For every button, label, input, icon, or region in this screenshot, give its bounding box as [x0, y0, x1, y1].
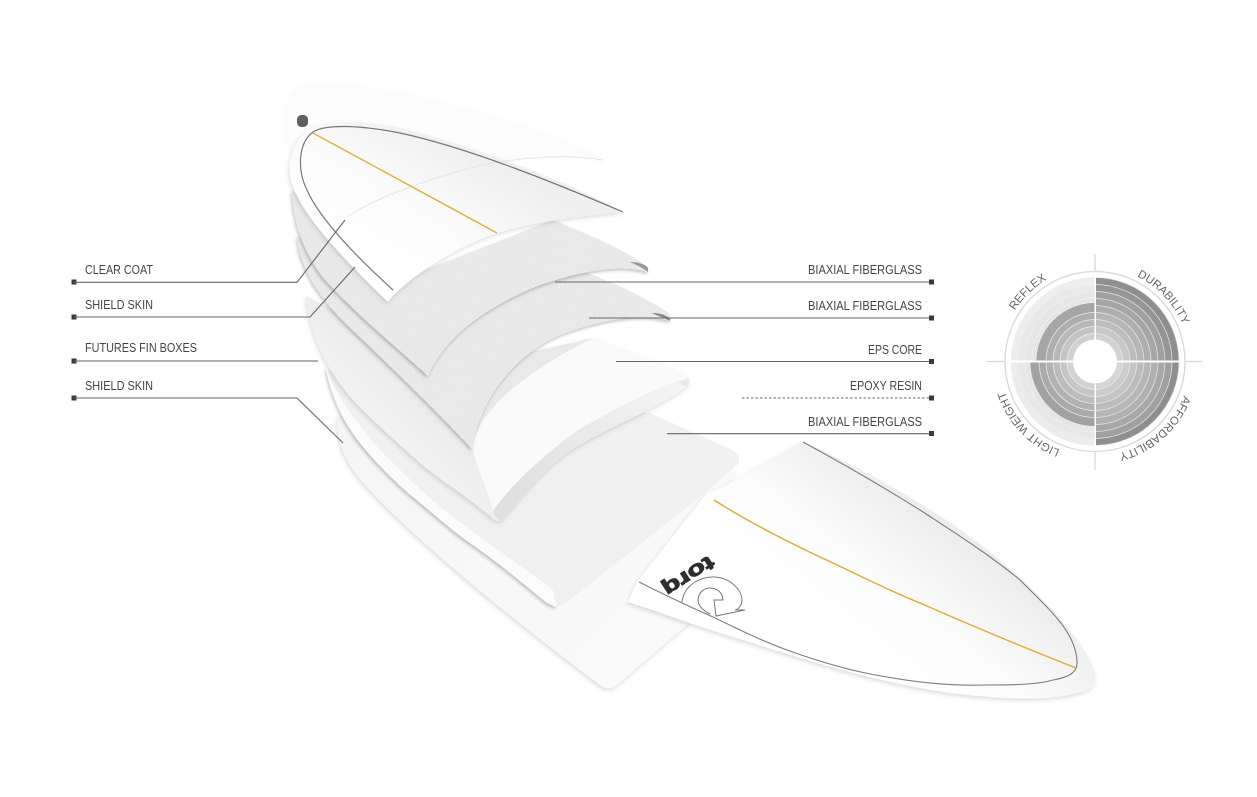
chart frame	[987, 254, 1202, 470]
chart label: durability: DURABILITY	[1138, 270, 1190, 322]
biaxial fiberglass layer two	[297, 236, 670, 449]
core cut side face	[493, 381, 686, 520]
bottom deck surface	[628, 442, 1095, 698]
EPS core	[306, 296, 689, 521]
quadrant: reflex	[1010, 277, 1094, 360]
ghost clear coat layer	[285, 84, 603, 217]
label: eps core: EPS CORE	[868, 342, 922, 357]
biaxial fiberglass layer one	[292, 190, 648, 376]
label: shield skin lower	[72, 378, 343, 443]
quadrant: affordability	[1096, 362, 1180, 446]
core top surface	[472, 338, 688, 511]
label: futures fin boxes	[72, 340, 318, 364]
bottom deck	[628, 442, 1095, 698]
white rail strip	[326, 368, 600, 607]
chart label: reflex: REFLEX	[1008, 273, 1046, 310]
label: epoxy resin	[742, 378, 934, 400]
bottom shield skin	[337, 415, 735, 688]
label: futures fin boxes: FUTURES FIN BOXES	[85, 340, 197, 355]
fin plug	[297, 115, 308, 127]
label: biaxial fiberglass 3: BIAXIAL FIBERGLASS	[808, 414, 922, 429]
label: epoxy resin: EPOXY RESIN	[850, 378, 922, 393]
label: biaxial fiberglass 2	[589, 298, 934, 320]
top stringer	[313, 133, 497, 233]
label: eps core	[616, 342, 934, 364]
logo wordmark: torq	[658, 551, 718, 600]
top deck with clear coat	[290, 122, 623, 302]
chart centre	[1073, 340, 1117, 384]
deck surface	[290, 122, 623, 302]
label: clear coat: CLEAR COAT	[85, 262, 153, 277]
label: clear coat	[72, 220, 345, 284]
clear coat edge line	[347, 157, 603, 217]
logo icon	[682, 577, 745, 616]
core body	[306, 296, 689, 521]
label: biaxial fiberglass 1: BIAXIAL FIBERGLASS	[808, 262, 922, 277]
biaxial fiberglass bottom layer	[328, 370, 739, 605]
right callouts	[555, 262, 934, 436]
top pinstripe	[300, 126, 623, 290]
radial performance chart	[987, 254, 1202, 470]
label: shield skin: SHIELD SKIN	[85, 297, 153, 312]
chart label: light weight: LIGHT WEIGHT	[997, 394, 1060, 457]
quadrant: durability	[1096, 277, 1180, 360]
label: biaxial fiberglass 1	[555, 262, 934, 284]
bottom stringer	[714, 500, 1076, 668]
fiberglass one dark tip	[630, 262, 648, 272]
label: shield skin lower: SHIELD SKIN	[85, 378, 153, 393]
bottom pinstripe	[639, 442, 1077, 685]
surfboard construction infographic	[72, 115, 1202, 702]
left callouts	[72, 220, 355, 443]
chart label: affordability: AFFORDABILITY	[1122, 396, 1190, 461]
fiberglass two dark tip	[652, 313, 670, 321]
label: biaxial fiberglass 3	[667, 414, 934, 436]
quadrant: light weight	[1010, 362, 1094, 446]
label: shield skin	[72, 267, 355, 320]
label: biaxial fiberglass 2: BIAXIAL FIBERGLASS	[808, 298, 922, 313]
